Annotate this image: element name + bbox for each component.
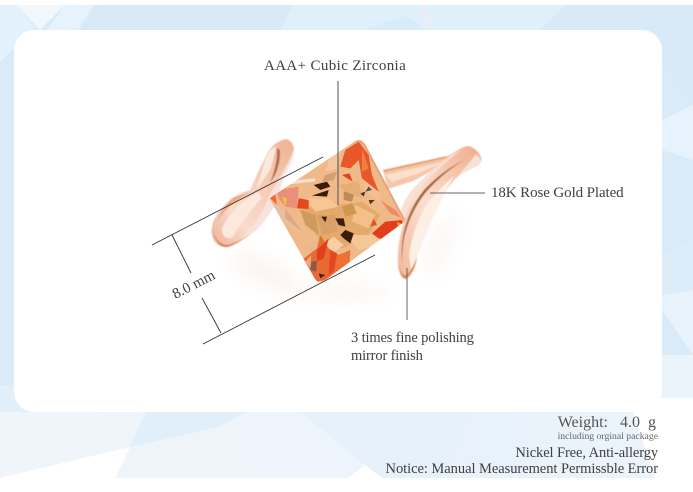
right band of ring [398, 146, 482, 279]
back band of ring [383, 150, 462, 189]
dark facets [314, 182, 330, 190]
ring illustration [211, 138, 482, 297]
left corner facets [270, 194, 277, 204]
leader: cubic zirconia [337, 81, 339, 205]
label: polishing [351, 330, 474, 364]
left band of ring [212, 139, 294, 247]
ring shadow [225, 206, 468, 301]
label: polishing: 3 times fine polishing [351, 330, 474, 346]
leader: polishing [406, 268, 408, 320]
spec: notice: Notice: Manual Measurement Permissble Error [386, 461, 658, 477]
panel: white rounded card [14, 30, 662, 412]
bottom corner facets [302, 235, 350, 282]
gemstone: square cubic zirconia [270, 140, 406, 282]
label: polishing: mirror finish [351, 348, 423, 364]
dimension lines: 8.0 mm [152, 157, 375, 344]
right corner facets [372, 220, 402, 239]
spec: weight: Weight: 4.0 g [558, 414, 656, 431]
label: 18K Rose Gold Plated: 18K Rose Gold Plated [491, 185, 624, 201]
spec: including package: including orginal package [558, 431, 658, 442]
leader: rose gold [430, 192, 485, 194]
label: 8.0 mm: 8.0 mm [170, 267, 218, 303]
center tan facets [299, 202, 380, 248]
label: AAA+ Cubic Zirconia: AAA+ Cubic Zirconia [264, 58, 406, 74]
gem metal rim [353, 141, 405, 220]
top corner facets [340, 142, 379, 192]
spec: nickel free: Nickel Free, Anti-allergy [515, 445, 658, 461]
